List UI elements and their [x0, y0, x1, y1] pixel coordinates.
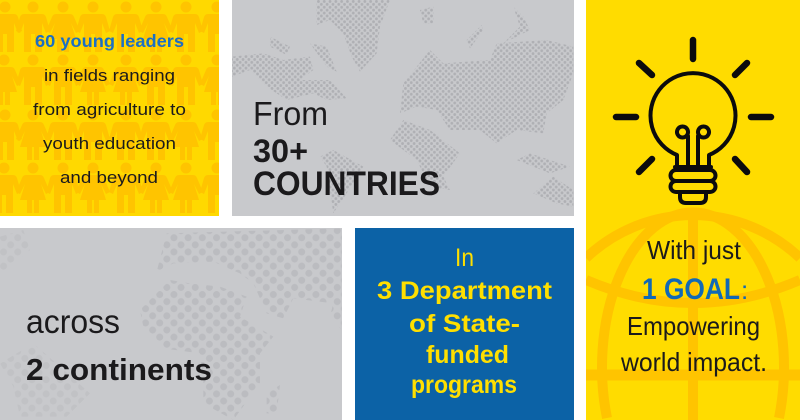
icon: light bulb	[616, 40, 771, 203]
text: COUNTRIES: COUNTRIES	[253, 165, 440, 203]
panel: 3 Department of State-funded programs	[355, 228, 574, 420]
panel: 30+ countries	[232, 0, 574, 216]
icon: bulb base	[670, 170, 716, 203]
text: fields line 3: youth education	[43, 134, 176, 153]
text: 60 young leaders: 60 young leaders	[35, 31, 184, 51]
icon: globe	[586, 212, 800, 420]
panel: 60 young leaders	[0, 0, 234, 216]
dotted continent map	[141, 228, 342, 417]
text: of State-: of State-	[409, 310, 520, 338]
text: fields line 2: from agriculture to	[33, 100, 186, 119]
text: fields line 1: in fields ranging	[44, 66, 175, 85]
text: With just: With just	[647, 235, 742, 265]
icon: bulb glass and filament	[650, 73, 736, 167]
text: Empowering: Empowering	[627, 311, 760, 341]
text: From: From	[253, 95, 328, 132]
text: In: In	[455, 244, 474, 272]
text: programs: programs	[411, 371, 517, 399]
panel: 2 continents	[0, 228, 342, 420]
text: fields line 4: and beyond	[60, 168, 158, 187]
icon: bulb rays	[616, 40, 771, 172]
text: 1 GOAL: 1 GOAL	[642, 273, 740, 306]
people pattern background	[0, 2, 234, 213]
text: across: across	[26, 303, 120, 340]
panel: 1 goal	[586, 0, 800, 420]
text: 2 continents: 2 continents	[26, 352, 212, 387]
dotted world map	[232, 0, 573, 213]
text: 30+: 30+	[253, 133, 308, 169]
text: funded: funded	[426, 341, 509, 369]
text: world impact.: world impact.	[620, 347, 767, 377]
text: colon: :	[741, 275, 748, 305]
text: 3 Department: 3 Department	[377, 277, 553, 305]
